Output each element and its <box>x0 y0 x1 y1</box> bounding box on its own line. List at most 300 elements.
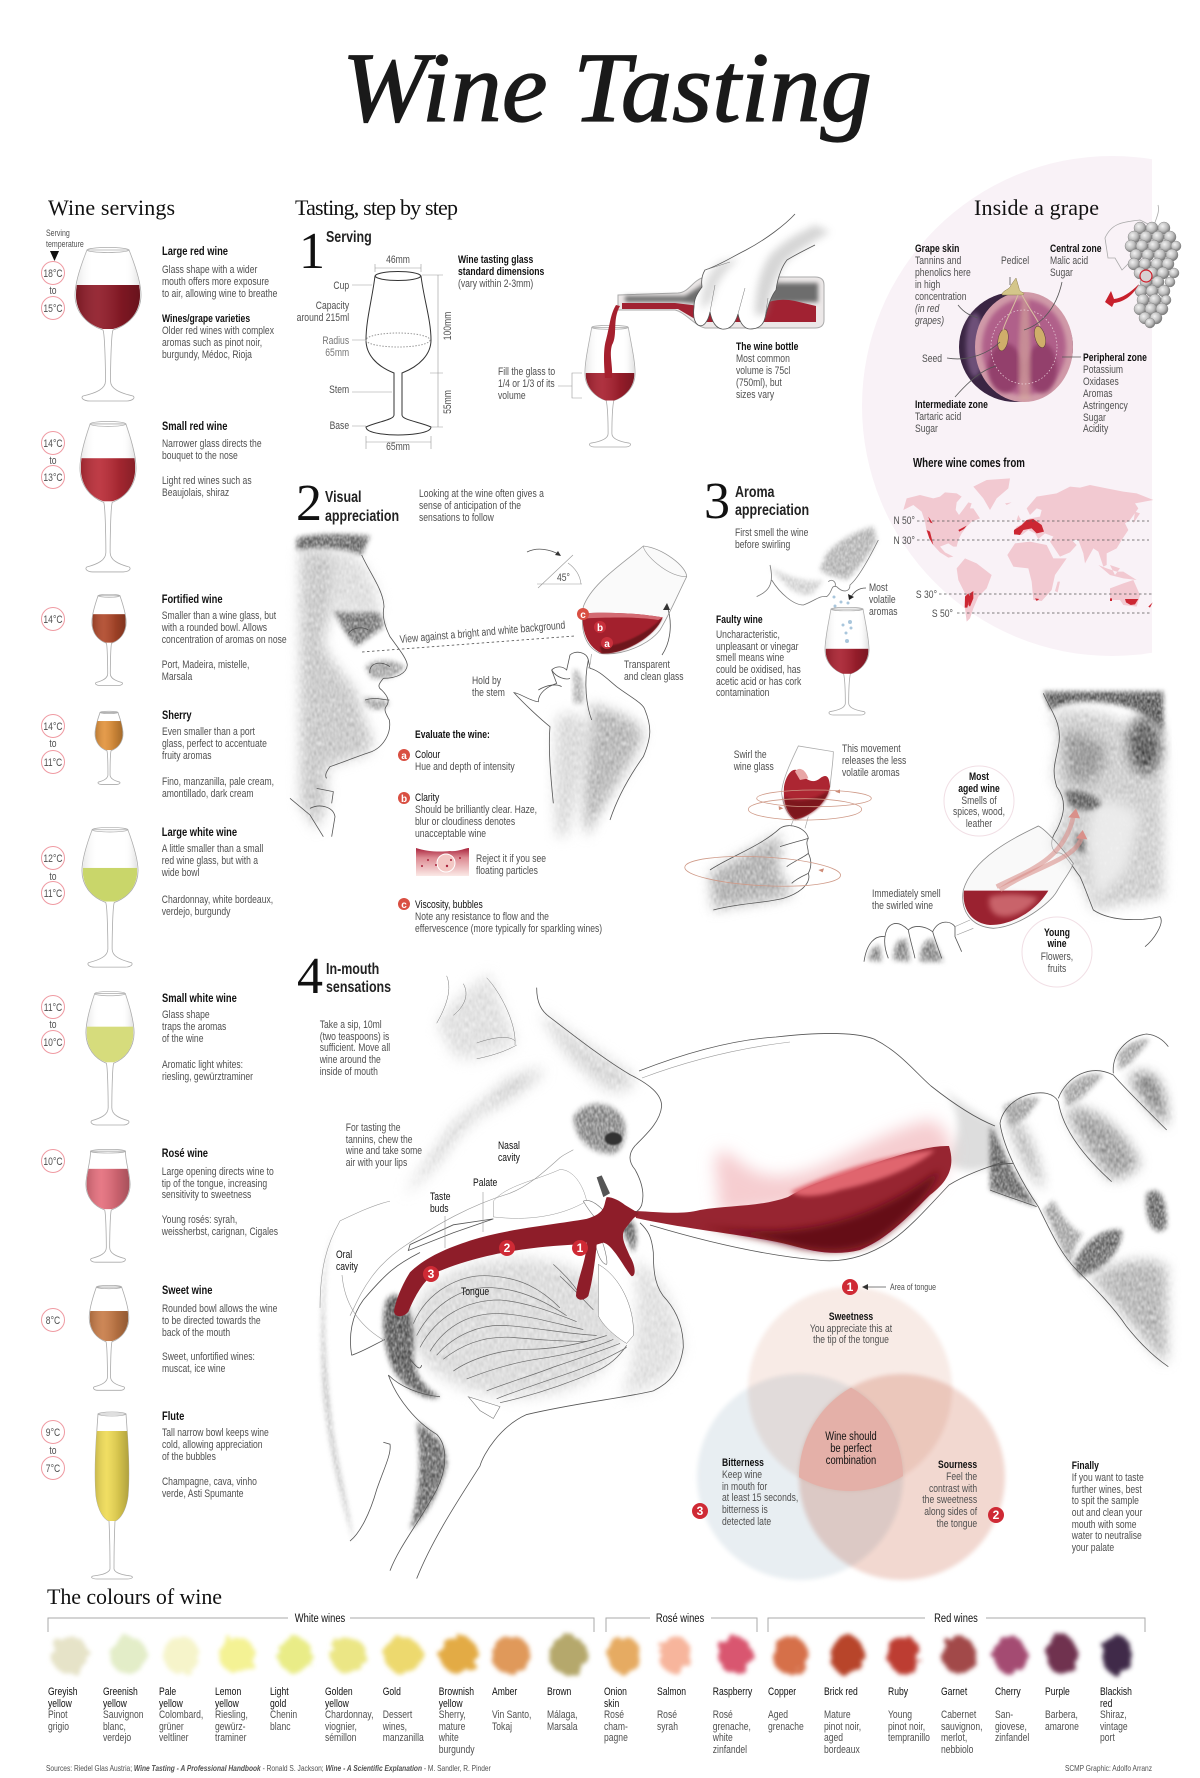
description: glass, perfect to accentuate <box>162 738 267 750</box>
colour labels: rose wines: grenache, <box>713 1721 751 1733</box>
red arrow <box>1105 284 1139 307</box>
colour labels: white wines: Riesling, <box>215 1709 248 1721</box>
step title: Serving <box>326 229 372 246</box>
temperature values: 18°C <box>43 268 63 280</box>
colour labels: red wines: Shiraz, <box>1100 1709 1127 1721</box>
wine glass <box>639 1033 1003 1261</box>
colour labels: red wines: San- <box>995 1709 1013 1721</box>
description: mouth offers more exposure <box>162 276 270 288</box>
sweetness: You appreciate this at <box>810 1323 892 1335</box>
peripheral zone label: Peripheral zone <box>1083 352 1147 364</box>
serving temperature label: temperature <box>46 239 84 249</box>
colour labels: rose wines: Rosé <box>657 1709 677 1721</box>
bitterness: bitterness is <box>722 1504 768 1516</box>
bottle note: sizes vary <box>736 389 774 401</box>
glass <box>95 711 123 784</box>
description: Small red wine <box>162 420 227 433</box>
colour labels: white wines: Dessert <box>383 1709 413 1721</box>
faulty wine: Faulty wine <box>716 614 763 626</box>
description: Aromatic light whites: <box>162 1059 243 1071</box>
colour labels: white wines: yellow <box>159 1698 184 1710</box>
aroma dots <box>832 596 852 643</box>
fill note and bracket: Fill the glass to <box>498 366 556 378</box>
45 degree diagram <box>527 549 582 588</box>
colour labels: rose wines: zinfandel <box>713 1744 747 1756</box>
glass <box>92 594 126 685</box>
step title: appreciation <box>325 508 399 525</box>
reject note: Reject it if you see <box>476 853 547 865</box>
description: A little smaller than a small <box>162 843 263 855</box>
bitterness: detected late <box>722 1516 772 1528</box>
bottle note: volume is 75cl <box>736 365 790 377</box>
colour labels: red wines: pinot noir, <box>888 1721 925 1733</box>
wine markers: a <box>604 639 610 650</box>
faulty wine: contamination <box>716 687 769 699</box>
aroma arrows <box>997 808 1087 890</box>
sweetness: the tip of the tongue <box>813 1334 889 1346</box>
description: Fortified wine <box>162 593 223 606</box>
colour labels: red wines: merlot, <box>941 1732 967 1744</box>
mouth labels: Nasal <box>498 1140 520 1152</box>
marker 3 <box>692 1503 708 1519</box>
colour labels: red wines: sauvignon, <box>941 1721 982 1733</box>
intro: sensations to follow <box>419 512 495 524</box>
colour labels: white wines: burgundy <box>439 1744 475 1756</box>
glass <box>92 1412 132 1579</box>
temperature badges <box>42 1420 64 1480</box>
colour labels: red wines: Purple <box>1045 1686 1070 1698</box>
temperature values: 12°C <box>43 853 63 865</box>
glass <box>82 827 138 967</box>
glass dimensions note: (vary within 2-3mm) <box>458 278 533 290</box>
description: Tall narrow bowl keeps wine <box>162 1427 269 1439</box>
faulty wine: unpleasant or vinegar <box>716 641 799 653</box>
description: verdejo, burgundy <box>162 906 230 918</box>
volatile aromas note <box>848 582 898 618</box>
bottle <box>618 277 824 328</box>
sources: Sources: Riedel Glas Austria; Wine Tasting - A Professional Handbook - Ronald S. Jackson; Wine - A Scientific Explanation - M. Sandler, R. Pinder <box>46 1763 491 1773</box>
colour: Hue and depth of intensity <box>415 761 515 773</box>
colour labels: white wines: Greenish <box>103 1686 138 1698</box>
bottle note: Most common <box>736 353 790 365</box>
temperature values: to <box>49 1019 57 1031</box>
viscosity: c <box>401 900 407 911</box>
colour labels: rose wines: syrah <box>657 1721 678 1733</box>
centre caption: be perfect <box>830 1442 872 1455</box>
temperature values: to <box>49 285 57 297</box>
grape bunch <box>1105 205 1181 328</box>
description: bouquet to the nose <box>162 450 238 462</box>
colour labels: white wines: yellow <box>325 1698 350 1710</box>
colour labels: white wines: mature <box>439 1721 466 1733</box>
faulty wine: acetic acid or has cork <box>716 676 801 688</box>
finally note: If you want to taste <box>1072 1472 1144 1484</box>
marker 2 <box>988 1507 1004 1523</box>
most aged wine callout: leather <box>966 818 993 830</box>
colour labels: white wines: Sauvignon <box>103 1709 144 1721</box>
finally note: to spit the sample <box>1072 1495 1139 1507</box>
colour labels: red wines: red <box>1100 1698 1112 1710</box>
description: Narrower glass directs the <box>162 438 262 450</box>
peripheral zone label: Sugar <box>1083 412 1107 424</box>
temperature values: to <box>49 1445 57 1457</box>
temperature values: to <box>49 455 57 467</box>
movement note: volatile aromas <box>842 767 900 779</box>
description: Young rosés: syrah, <box>162 1214 237 1226</box>
sourness: along sides of <box>924 1506 977 1518</box>
colour: a <box>401 751 407 762</box>
description: Sweet wine <box>162 1284 212 1297</box>
colour labels: white wines: Lemon <box>215 1686 241 1698</box>
fill note and bracket: 1/4 or 1/3 of its <box>498 378 555 390</box>
viscosity: Viscosity, bubbles <box>415 899 483 911</box>
peripheral zone label: Astringency <box>1083 400 1128 412</box>
movement note: This movement <box>842 743 901 755</box>
glass dimensions diagram: Capacity <box>316 300 349 312</box>
colour labels: white wines: gewürz- <box>215 1721 246 1733</box>
glass dimensions diagram: 55mm <box>442 390 454 414</box>
colour labels: red wines: Cabernet <box>941 1709 977 1721</box>
fill note and bracket <box>498 366 582 402</box>
category brackets: Rosé wines <box>656 1612 704 1625</box>
mouth labels: Palate <box>473 1177 498 1189</box>
colour labels: white wines: verdejo <box>103 1732 132 1744</box>
clarity: unacceptable wine <box>415 828 486 840</box>
sight line caption: View against a bright and white background <box>399 620 566 646</box>
colour labels: white wines: traminer <box>215 1732 247 1744</box>
swirling glass and hand <box>684 746 871 910</box>
description: weissherbst, carignan, Cigales <box>161 1226 278 1238</box>
colour labels: red wines <box>768 1686 1132 1756</box>
colour labels: red wines: Young <box>888 1709 912 1721</box>
colour labels: white wines: Amber <box>492 1686 518 1698</box>
colour: Colour <box>415 749 441 761</box>
colour labels: white wines: Pinot <box>48 1709 68 1721</box>
colour labels: white wines: Gold <box>383 1686 401 1698</box>
colour labels: white wines: gold <box>270 1698 286 1710</box>
bunch highlight circle <box>1140 270 1152 282</box>
description: Marsala <box>162 671 193 683</box>
colour labels: white wines: viognier, <box>325 1721 357 1733</box>
description: muscat, ice wine <box>162 1363 226 1375</box>
cupped hand <box>864 920 973 962</box>
colour labels: rose wines: pagne <box>604 1732 628 1744</box>
latitude lines <box>893 515 1152 620</box>
tongue area markers: 3 <box>428 1267 435 1281</box>
wine markers: c <box>580 610 586 621</box>
faulty wine: smell means wine <box>716 652 785 664</box>
panel: step 3 aroma appreciation <box>684 473 1163 987</box>
small red wine <box>42 420 262 572</box>
wine markers <box>577 608 613 650</box>
sourness: the tongue <box>937 1518 978 1530</box>
temperature badges <box>42 996 64 1054</box>
description: Small white wine <box>162 992 237 1005</box>
pouring glass <box>585 325 635 447</box>
grape skin label: in high <box>915 279 940 291</box>
glass dimensions diagram: Stem <box>329 384 349 396</box>
colour labels: red wines: Brick red <box>824 1686 858 1698</box>
centre caption: Wine should <box>825 1430 877 1443</box>
temperature values: 11°C <box>44 888 62 900</box>
colour labels: white wines: Brownish <box>439 1686 474 1698</box>
latitude lines: S 50° <box>932 608 953 620</box>
colour labels: white wines: blanc <box>270 1721 291 1733</box>
viscosity: Note any resistance to flow and the <box>415 911 549 923</box>
panel: step 1 serving <box>297 205 850 453</box>
volatile aromas note: aromas <box>869 606 898 618</box>
description: Large opening directs wine to <box>162 1166 274 1178</box>
colour labels: white wines: Colombard, <box>159 1709 203 1721</box>
rose wine <box>42 1147 278 1262</box>
mouth labels <box>336 1140 520 1342</box>
colour labels: white wines: Golden <box>325 1686 353 1698</box>
young wine callout <box>1022 917 1092 987</box>
description: burgundy, Médoc, Rioja <box>162 349 252 361</box>
tongue area markers: 1 <box>577 1241 584 1255</box>
colour labels: white wines: Vin Santo, <box>492 1709 531 1721</box>
description: verde, Asti Spumante <box>162 1488 244 1500</box>
colour labels: white wines: veltliner <box>159 1732 189 1744</box>
taste venn diagram <box>697 1287 1005 1580</box>
panel: step 2 visual appreciation <box>290 475 687 935</box>
right head smelling <box>1043 692 1163 947</box>
finally note: mouth with some <box>1072 1519 1137 1531</box>
temperature value: 14°C <box>43 614 63 626</box>
bitterness: Bitterness <box>722 1457 764 1469</box>
panel: inside a grape <box>893 195 1181 622</box>
description: Chardonnay, white bordeaux, <box>162 894 273 906</box>
colour labels: red wines: bordeaux <box>824 1744 860 1756</box>
first smell note: before swirling <box>735 539 790 551</box>
description: to be directed towards the <box>162 1315 261 1327</box>
heading: tasting step by step: Tasting, step by step <box>295 195 458 220</box>
description: Glass shape <box>162 1009 210 1021</box>
central zone label: Malic acid <box>1050 255 1088 267</box>
latitude lines: N 50° <box>893 515 915 527</box>
reject note: floating particles <box>476 865 538 877</box>
sourness: contrast with <box>929 1483 977 1495</box>
young wine callout: Young <box>1044 927 1070 939</box>
colour labels: red wines: amarone <box>1045 1721 1079 1733</box>
colour labels: rose wines: Rosé <box>713 1709 733 1721</box>
intermediate zone label: Intermediate zone <box>915 399 988 411</box>
sip note: wine around the <box>319 1054 381 1066</box>
intro: Looking at the wine often gives a <box>419 488 544 500</box>
temperature badge <box>42 1308 64 1332</box>
graphic credit: SCMP Graphic: Adolfo Arranz <box>1065 1763 1152 1773</box>
glass dimensions diagram: 100mm <box>442 312 454 340</box>
temperature values: 13°C <box>43 472 63 484</box>
glass dimensions diagram: 65mm <box>325 347 349 359</box>
description: Rosé wine <box>162 1147 208 1160</box>
colour labels: rose wines: cham- <box>604 1721 628 1733</box>
glass <box>86 991 134 1125</box>
description: amontillado, dark cream <box>162 788 254 800</box>
peripheral zone label: Acidity <box>1083 423 1108 435</box>
colour labels: white wines: Tokaj <box>492 1721 512 1733</box>
colour labels: white wines: Chenin <box>270 1709 297 1721</box>
colour labels: red wines: Blackish <box>1100 1686 1132 1698</box>
temperature badges <box>42 714 64 774</box>
step number 2: 2 <box>296 475 322 532</box>
colour labels: rose wines: Salmon <box>657 1686 686 1698</box>
peripheral zone label: Aromas <box>1083 388 1113 400</box>
temperature values: to <box>49 871 57 883</box>
serving temperature label <box>46 228 84 261</box>
wine in glass <box>634 1146 951 1253</box>
movement note: releases the less <box>842 755 906 767</box>
colour labels: white wines: Brown <box>547 1686 571 1698</box>
grape skin label: Grape skin <box>915 243 959 255</box>
temperature values: 15°C <box>43 303 63 315</box>
colour labels: red wines: pinot noir, <box>824 1721 861 1733</box>
young wine callout: wine <box>1047 938 1067 950</box>
heading: wine servings: Wine servings <box>48 195 175 220</box>
tannins note: air with your lips <box>346 1157 407 1169</box>
glass <box>86 1149 130 1262</box>
world map <box>903 478 1153 622</box>
description: Beaujolais, shiraz <box>162 487 229 499</box>
45 degree diagram: 45° <box>557 572 570 584</box>
description: sensitivity to sweetness <box>162 1189 251 1201</box>
colour labels: red wines: giovese, <box>995 1721 1027 1733</box>
profile head <box>290 534 407 837</box>
clarity <box>398 792 537 840</box>
bottle note: The wine bottle <box>736 341 799 353</box>
glass dimensions diagram: around 215ml <box>297 312 349 324</box>
pouring hand <box>694 205 850 329</box>
glass <box>89 1285 129 1390</box>
panel: step 4 in-mouth sensations <box>297 948 1168 1580</box>
volatile aromas note: volatile <box>869 594 896 606</box>
grape skin label: grapes) <box>915 315 944 327</box>
colour labels: red wines: Copper <box>768 1686 797 1698</box>
viscosity <box>398 898 602 935</box>
faulty wine: Uncharacteristic, <box>716 629 780 641</box>
large red wine <box>42 245 278 401</box>
description: wide bowl <box>161 867 199 879</box>
marker 3: 3 <box>697 1504 704 1518</box>
glass dimensions diagram: Radius <box>322 335 349 347</box>
description: Fino, manzanilla, pale cream, <box>162 776 274 788</box>
colour labels: white wines: Málaga, <box>547 1709 578 1721</box>
colour labels: red wines: Cherry <box>995 1686 1021 1698</box>
most aged wine callout: aged wine <box>958 783 1000 795</box>
description: Large red wine <box>162 245 228 258</box>
colour labels: white wines: grigio <box>48 1721 69 1733</box>
colour labels: rose wines <box>604 1686 752 1756</box>
colour labels: rose wines: skin <box>604 1698 619 1710</box>
mouth labels: Oral <box>336 1249 352 1261</box>
colour labels: white wines: yellow <box>48 1698 73 1710</box>
temperature values: 14°C <box>43 721 63 733</box>
bitterness: Keep wine <box>722 1469 762 1481</box>
temperature value: 10°C <box>43 1156 63 1168</box>
fortified wine <box>42 593 287 685</box>
sip note: sufficient. Move all <box>320 1042 390 1054</box>
grape skin label: concentration <box>915 291 966 303</box>
aroma glass <box>825 607 869 715</box>
description: tip of the tongue, increasing <box>162 1178 267 1190</box>
small white wine <box>42 991 254 1125</box>
central zone label: Central zone <box>1050 243 1102 255</box>
transparent note: Transparent <box>624 659 670 671</box>
latitude lines: S 30° <box>916 589 937 601</box>
glass dimensions diagram: 46mm <box>386 254 410 266</box>
colour swatches <box>51 1635 1132 1675</box>
tannins note: tannins, chew the <box>346 1134 413 1146</box>
description: traps the aromas <box>162 1021 226 1033</box>
colour labels: white wines: blanc, <box>103 1721 126 1733</box>
right hand <box>990 1034 1168 1367</box>
mouth cross-section <box>320 976 683 1579</box>
sherry <box>42 709 274 800</box>
colour <box>398 749 515 773</box>
glass dimensions diagram: Base <box>330 420 350 432</box>
temperature values: 7°C <box>46 1463 60 1475</box>
temperature values: to <box>49 738 57 750</box>
transparent note <box>624 603 684 683</box>
sip note: Take a sip, 10ml <box>320 1019 382 1031</box>
description: Rounded bowl allows the wine <box>162 1303 278 1315</box>
central zone label: Sugar <box>1050 267 1074 279</box>
large tilted glass <box>963 826 1073 928</box>
clarity: Should be brilliantly clear. Haze, <box>415 804 537 816</box>
colour labels: white wines: Greyish <box>48 1686 78 1698</box>
colour labels: white wines: yellow <box>103 1698 128 1710</box>
description: aromas such as pinot noir, <box>162 337 262 349</box>
colour labels: red wines: Aged <box>768 1709 788 1721</box>
marker 2: 2 <box>993 1508 1000 1522</box>
sourness: Feel the <box>946 1471 978 1483</box>
bottle note: (750ml), but <box>736 377 782 389</box>
step title: In-mouth <box>326 961 379 978</box>
mouth labels: Taste <box>430 1191 451 1203</box>
evaluate the wine: Evaluate the wine: <box>415 729 490 741</box>
finally note: out and clean your <box>1072 1507 1143 1519</box>
tongue area markers: 2 <box>504 1241 511 1255</box>
step number 3: 3 <box>704 473 730 530</box>
peripheral zone label: Oxidases <box>1083 376 1119 388</box>
transparent note: and clean glass <box>624 671 684 683</box>
sip note: inside of mouth <box>320 1066 378 1078</box>
glass <box>80 421 136 572</box>
step number 4: 4 <box>297 948 323 1005</box>
sweet wine <box>42 1284 278 1390</box>
description: concentration of aromas on nose <box>162 634 287 646</box>
intro: sense of anticipation of the <box>419 500 521 512</box>
grape leader lines <box>947 277 1081 397</box>
intermediate zone label: Tartaric acid <box>915 411 961 423</box>
colour labels: white wines: manzanilla <box>383 1732 424 1744</box>
mouth labels: cavity <box>336 1261 358 1273</box>
colour labels: red wines: Mature <box>824 1709 851 1721</box>
grape skin label: phenolics here <box>915 267 971 279</box>
centre caption: combination <box>826 1454 876 1467</box>
tilted glass <box>582 546 687 668</box>
peripheral zone label: Potassium <box>1083 364 1123 376</box>
description: Champagne, cava, vinho <box>162 1476 257 1488</box>
clarity: blur or cloudiness denotes <box>415 816 515 828</box>
step title: Visual <box>325 489 361 506</box>
tannins note: wine and take some <box>345 1145 422 1157</box>
temperature badges <box>42 846 64 904</box>
clarity: Clarity <box>415 792 439 804</box>
temperature values: 14°C <box>43 438 63 450</box>
temperature value: 8°C <box>46 1315 60 1327</box>
grape skin label: (in red <box>915 303 940 315</box>
